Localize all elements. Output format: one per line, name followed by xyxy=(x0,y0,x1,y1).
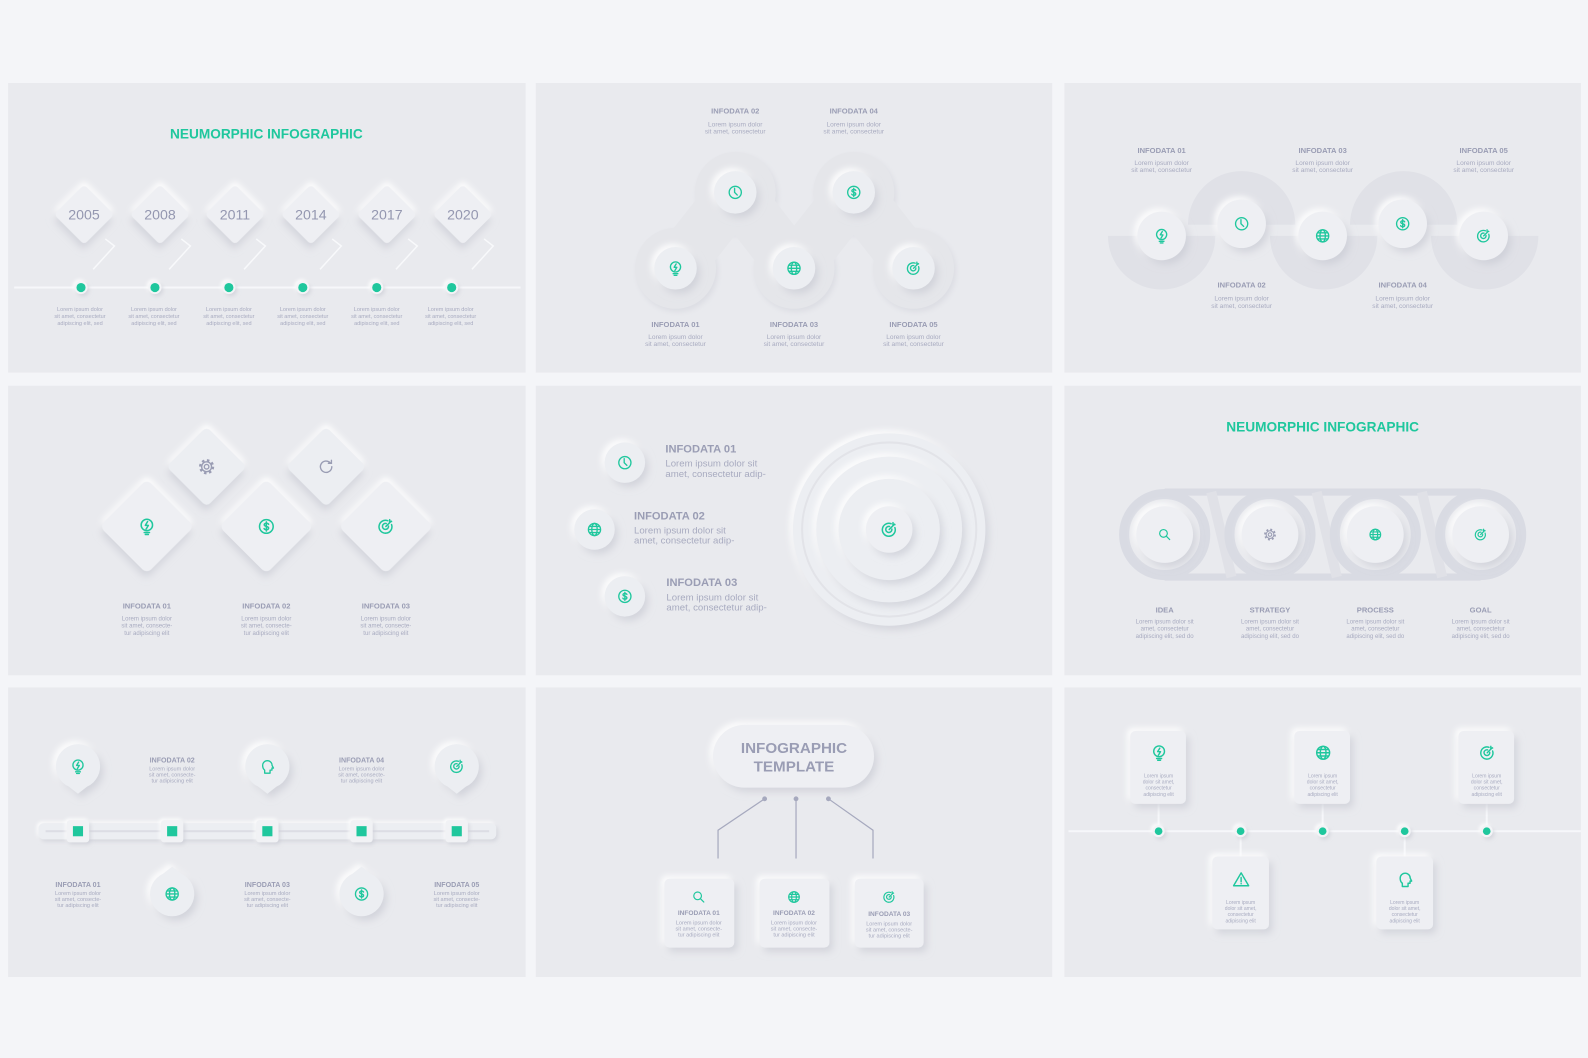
panel: wave circles xyxy=(536,83,1052,373)
labels: sit amet, consectetur xyxy=(1453,167,1515,174)
timeline dots and text xyxy=(54,281,476,327)
cards: consectetur xyxy=(1474,786,1500,792)
boxes: tur adipiscing elit xyxy=(678,933,720,939)
boxes: INFODATA 02 xyxy=(773,910,815,917)
labels: Lorem ipsum dolor xyxy=(1375,296,1431,303)
cards: adipiscing elit xyxy=(1143,792,1174,798)
labels: INFODATA 02 xyxy=(1217,281,1266,290)
labels: sit amet, consecte- xyxy=(360,624,411,630)
timeline line xyxy=(14,287,521,289)
connectors and dots xyxy=(1153,804,1493,857)
labels: INFODATA 02 xyxy=(150,756,195,764)
item list: Lorem ipsum dolor sit xyxy=(665,459,758,470)
boxes: sit amet, consecte- xyxy=(866,927,913,933)
labels: tur adipiscing elit xyxy=(244,631,289,637)
labels: sit amet, consecte- xyxy=(338,773,385,779)
cards: consectetur xyxy=(1392,912,1418,918)
year diamonds: 2005 xyxy=(68,208,100,224)
labels: sit amet, consecte- xyxy=(121,624,172,630)
labels: Lorem ipsum dolor xyxy=(244,891,290,897)
labels: INFODATA 05 xyxy=(889,320,938,329)
line xyxy=(1068,830,1581,832)
item list: Lorem ipsum dolor sit xyxy=(634,526,726,537)
timeline dots and text: Lorem ipsum dolor xyxy=(206,307,252,313)
panel: slider pins xyxy=(8,687,526,977)
cards: consectetur xyxy=(1228,912,1254,918)
arcs xyxy=(1108,171,1538,290)
item list: INFODATA 03 xyxy=(666,577,737,589)
cards: Lorem ipsum xyxy=(1226,900,1255,906)
labels: Lorem ipsum dolor xyxy=(648,334,704,341)
labels: sit amet, consectetur xyxy=(1211,303,1273,310)
cards: dolor sit amet, xyxy=(1225,906,1256,912)
chain xyxy=(1124,492,1521,577)
labels: adipiscing elit, sed do xyxy=(1346,634,1405,640)
labels: INFODATA 03 xyxy=(245,881,290,889)
boxes: Lorem ipsum dolor xyxy=(866,921,912,927)
item list: amet, consectetur adip- xyxy=(666,603,767,614)
boxes: tur adipiscing elit xyxy=(869,934,910,940)
labels: INFODATA 03 xyxy=(1299,146,1347,155)
title pill: TEMPLATE xyxy=(754,758,834,775)
item list: Lorem ipsum dolor sit xyxy=(666,592,759,603)
labels: amet, consectetur xyxy=(1141,627,1189,633)
year diamonds: 2020 xyxy=(447,208,479,224)
year diamonds: 2008 xyxy=(144,208,176,224)
labels: tur adipiscing elit xyxy=(124,631,170,637)
cards: dolor sit amet, xyxy=(1389,906,1421,912)
wave band xyxy=(635,152,956,312)
labels xyxy=(55,756,480,909)
cards xyxy=(1130,731,1514,929)
labels: tur adipiscing elit xyxy=(363,631,409,637)
boxes: INFODATA 03 xyxy=(868,911,910,918)
labels: sit amet, consectetur xyxy=(823,129,885,136)
labels: Lorem ipsum dolor xyxy=(339,766,385,772)
labels: Lorem ipsum dolor xyxy=(122,617,172,623)
rings xyxy=(793,433,985,626)
labels: INFODATA 03 xyxy=(770,320,818,329)
timeline dots and text: adipiscing elit, sed xyxy=(354,321,399,327)
labels: Lorem ipsum dolor xyxy=(1214,296,1270,303)
labels: sit amet, consecte- xyxy=(433,897,480,903)
labels: tur adipiscing elit xyxy=(436,903,478,909)
labels: INFODATA 04 xyxy=(830,106,879,115)
labels: adipiscing elit, sed do xyxy=(1452,634,1510,640)
labels: Lorem ipsum dolor xyxy=(886,334,942,341)
labels: Lorem ipsum dolor sit xyxy=(1136,620,1194,626)
timeline dots and text: adipiscing elit, sed xyxy=(206,321,252,327)
title pill xyxy=(713,725,874,788)
labels: Lorem ipsum dolor xyxy=(827,122,882,129)
labels: INFODATA 01 xyxy=(55,881,101,889)
labels: amet, consectetur xyxy=(1246,627,1294,633)
timeline dots and text: sit amet, consectetur xyxy=(54,314,106,320)
labels: Lorem ipsum dolor xyxy=(767,334,822,341)
year diamonds: 2017 xyxy=(371,208,403,224)
item list: INFODATA 02 xyxy=(634,510,705,522)
buttons xyxy=(1137,199,1508,260)
labels: INFODATA 01 xyxy=(123,601,171,610)
labels: Lorem ipsum dolor sit xyxy=(1452,620,1510,626)
panel: timeline years xyxy=(8,83,526,373)
timeline dots and text: Lorem ipsum dolor xyxy=(57,307,103,313)
panel: concentric target xyxy=(536,386,1052,675)
labels: sit amet, consectetur xyxy=(1131,167,1193,174)
cards: dolor sit amet, xyxy=(1307,780,1339,786)
boxes xyxy=(664,879,924,948)
labels: sit amet, consecte- xyxy=(55,897,101,903)
timeline dots and text: sit amet, consectetur xyxy=(203,314,255,320)
labels xyxy=(1131,146,1515,310)
labels: adipiscing elit, sed do xyxy=(1241,634,1300,640)
cards: Lorem ipsum xyxy=(1308,774,1337,780)
large diamonds xyxy=(100,479,433,574)
boxes: INFODATA 01 xyxy=(678,910,720,917)
labels: tur adipiscing elit xyxy=(57,903,99,909)
labels: Lorem ipsum dolor xyxy=(434,891,480,897)
boxes: tur adipiscing elit xyxy=(773,933,815,939)
labels: tur adipiscing elit xyxy=(152,779,193,785)
item list: amet, consectetur adip- xyxy=(665,469,766,480)
labels: sit amet, consectetur xyxy=(883,341,945,348)
labels xyxy=(645,106,945,348)
labels: sit amet, consecte- xyxy=(241,624,292,630)
panel: snake arcs xyxy=(1064,83,1581,373)
title pill: INFOGRAPHIC xyxy=(741,740,847,757)
labels: tur adipiscing elit xyxy=(341,779,383,785)
labels: INFODATA 01 xyxy=(1137,146,1186,155)
labels: STRATEGY xyxy=(1250,606,1290,615)
pins xyxy=(56,744,479,916)
cards: dolor sit amet, xyxy=(1471,780,1503,786)
timeline dots and text: Lorem ipsum dolor xyxy=(280,307,326,313)
cards: Lorem ipsum xyxy=(1472,774,1501,780)
buttons xyxy=(654,171,935,290)
panel: chain process xyxy=(1064,386,1581,675)
labels: GOAL xyxy=(1470,606,1492,615)
cards: Lorem ipsum xyxy=(1144,774,1173,780)
cards: consectetur xyxy=(1310,786,1336,792)
labels: amet, consectetur xyxy=(1351,627,1399,633)
cards: consectetur xyxy=(1146,786,1172,792)
connectors xyxy=(718,797,873,859)
timeline dots and text: sit amet, consectetur xyxy=(277,314,329,320)
labels: INFODATA 01 xyxy=(651,320,700,329)
labels: INFODATA 05 xyxy=(434,881,479,889)
timeline dots and text: sit amet, consectetur xyxy=(128,314,180,320)
timeline dots and text: Lorem ipsum dolor xyxy=(354,307,400,313)
labels: Lorem ipsum dolor xyxy=(241,617,291,623)
cards: adipiscing elit xyxy=(1225,918,1256,924)
labels: PROCESS xyxy=(1357,606,1394,615)
labels xyxy=(1136,606,1510,640)
boxes: sit amet, consecte- xyxy=(676,926,722,932)
boxes: Lorem ipsum dolor xyxy=(676,920,722,926)
labels: sit amet, consectetur xyxy=(764,341,825,348)
timeline dots and text: adipiscing elit, sed xyxy=(131,321,177,327)
item list: amet, consectetur adip- xyxy=(634,536,734,547)
timeline dots and text: adipiscing elit, sed xyxy=(280,321,325,327)
year diamonds: 2014 xyxy=(295,208,327,224)
labels: sit amet, consecte- xyxy=(149,773,196,779)
title: NEUMORPHIC INFOGRAPHIC xyxy=(1226,419,1419,434)
timeline dots and text: Lorem ipsum dolor xyxy=(428,307,474,313)
cards: adipiscing elit xyxy=(1472,792,1502,798)
year diamonds: 2011 xyxy=(220,208,250,224)
labels: Lorem ipsum dolor xyxy=(149,766,195,772)
labels: amet, consectetur xyxy=(1457,627,1505,633)
labels: IDEA xyxy=(1156,606,1174,615)
labels: adipiscing elit, sed do xyxy=(1136,634,1194,640)
cards: dolor sit amet, xyxy=(1143,780,1174,786)
item list xyxy=(574,442,767,617)
labels: Lorem ipsum dolor sit xyxy=(1346,620,1405,626)
slider bar xyxy=(38,820,496,842)
cards: adipiscing elit xyxy=(1390,918,1420,924)
labels: sit amet, consectetur xyxy=(1292,167,1354,174)
labels: Lorem ipsum dolor xyxy=(1295,160,1351,167)
title: NEUMORPHIC INFOGRAPHIC xyxy=(170,127,363,142)
labels: sit amet, consectetur xyxy=(705,129,766,136)
labels: INFODATA 04 xyxy=(1379,281,1428,290)
boxes: Lorem ipsum dolor xyxy=(771,920,817,926)
timeline dots and text: Lorem ipsum dolor xyxy=(131,307,177,313)
timeline dots and text: adipiscing elit, sed xyxy=(428,321,473,327)
labels: Lorem ipsum dolor sit xyxy=(1241,620,1299,626)
panel: template tree xyxy=(536,687,1052,977)
labels: tur adipiscing elit xyxy=(247,903,288,909)
labels: sit amet, consectetur xyxy=(1372,303,1434,310)
labels: INFODATA 04 xyxy=(339,756,384,764)
timeline dots and text: sit amet, consectetur xyxy=(351,314,402,320)
labels xyxy=(121,601,411,637)
timeline dots and text: sit amet, consectetur xyxy=(425,314,476,320)
boxes: sit amet, consecte- xyxy=(771,926,817,932)
cards: Lorem ipsum xyxy=(1390,900,1419,906)
labels: INFODATA 05 xyxy=(1460,146,1508,155)
year diamonds xyxy=(54,185,493,269)
labels: INFODATA 02 xyxy=(711,106,759,115)
labels: INFODATA 02 xyxy=(242,601,290,610)
labels: sit amet, consectetur xyxy=(645,341,707,348)
item list: INFODATA 01 xyxy=(665,444,736,456)
labels: sit amet, consecte- xyxy=(244,897,291,903)
timeline dots and text: adipiscing elit, sed xyxy=(57,321,103,327)
labels: Lorem ipsum dolor xyxy=(55,891,101,897)
labels: Lorem ipsum dolor xyxy=(1134,160,1190,167)
cards: adipiscing elit xyxy=(1307,792,1338,798)
panel: card timeline xyxy=(1064,687,1581,977)
labels: Lorem ipsum dolor xyxy=(1456,160,1512,167)
labels: INFODATA 03 xyxy=(362,601,410,610)
labels: Lorem ipsum dolor xyxy=(361,617,411,623)
panel: diamonds xyxy=(8,386,526,675)
labels: Lorem ipsum dolor xyxy=(708,122,763,129)
small diamonds xyxy=(166,427,366,507)
